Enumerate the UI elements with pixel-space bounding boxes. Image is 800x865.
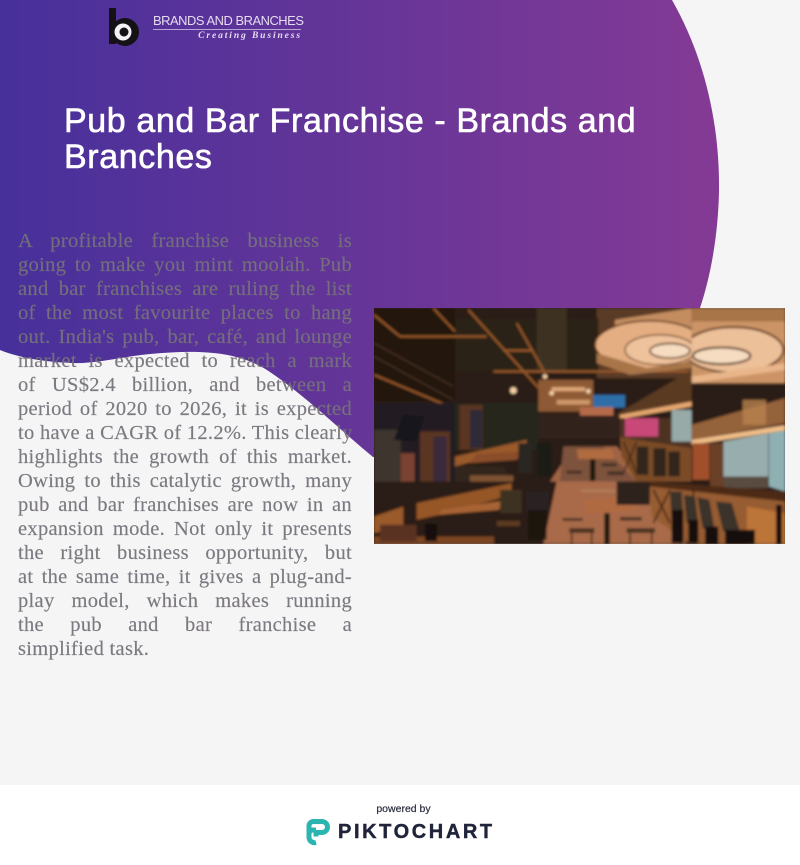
body text block: period of 2020 to 2026, it is expected	[18, 398, 352, 420]
title: Pub and Bar Franchise - Brands and	[64, 102, 636, 140]
body text block: pub and bar franchises are now in an	[18, 494, 352, 516]
lamp left	[595, 308, 705, 375]
Piktochart wordmark: PIKTOCHART	[338, 821, 495, 843]
title	[64, 102, 636, 176]
body text block: going to make you mint moolah. Pub	[18, 254, 352, 276]
logo wordmark	[153, 13, 304, 41]
icon: b mark	[109, 8, 139, 46]
icon: Piktochart logo mark	[306, 819, 330, 846]
floor	[547, 446, 687, 544]
body text block: market is expected to reach a mark	[18, 350, 352, 372]
left wall	[374, 400, 456, 480]
upper section bar	[620, 437, 692, 482]
logo wordmark: BRANDS AND BRANCHES	[153, 13, 303, 28]
body text block: of US$2.4 billion, and between a	[18, 374, 352, 396]
body text block: play model, which makes running	[18, 590, 352, 612]
body text block: of the most favourite places to hang	[18, 302, 352, 324]
body text block: A profitable franchise business is	[18, 230, 352, 252]
central hanging lights	[538, 380, 593, 412]
title: Branches	[64, 138, 212, 176]
logo wordmark: Creating Business	[198, 31, 302, 41]
body text block: Owing to this catalytic growth, many	[18, 470, 352, 492]
body text block: expansion mode. Not only it presents	[18, 518, 352, 540]
lower section	[374, 480, 558, 540]
body text block: to have a CAGR of 12.2%. This clearly	[18, 422, 353, 444]
body text block: simplified task.	[18, 638, 149, 660]
photo: pub and bar interior	[374, 308, 785, 544]
logo: Brands and Branches	[109, 8, 304, 46]
lamp right	[683, 308, 785, 383]
body text block: the pub and bar franchise a	[18, 614, 352, 636]
body text block: out. India's pub, bar, café, and lounge	[18, 326, 352, 348]
body text block: highlights the growth of this market.	[18, 446, 352, 468]
balcony and walls right	[618, 370, 692, 418]
powered by label: powered by	[376, 803, 431, 815]
body text block: and bar franchises are ruling the list	[18, 278, 352, 300]
lower bar	[650, 482, 785, 544]
body text block: the right business opportunity, but	[18, 542, 352, 564]
body text block	[18, 230, 353, 660]
body text block: at the same time, it gives a plug-and-	[18, 566, 352, 588]
footer bar	[0, 785, 800, 865]
